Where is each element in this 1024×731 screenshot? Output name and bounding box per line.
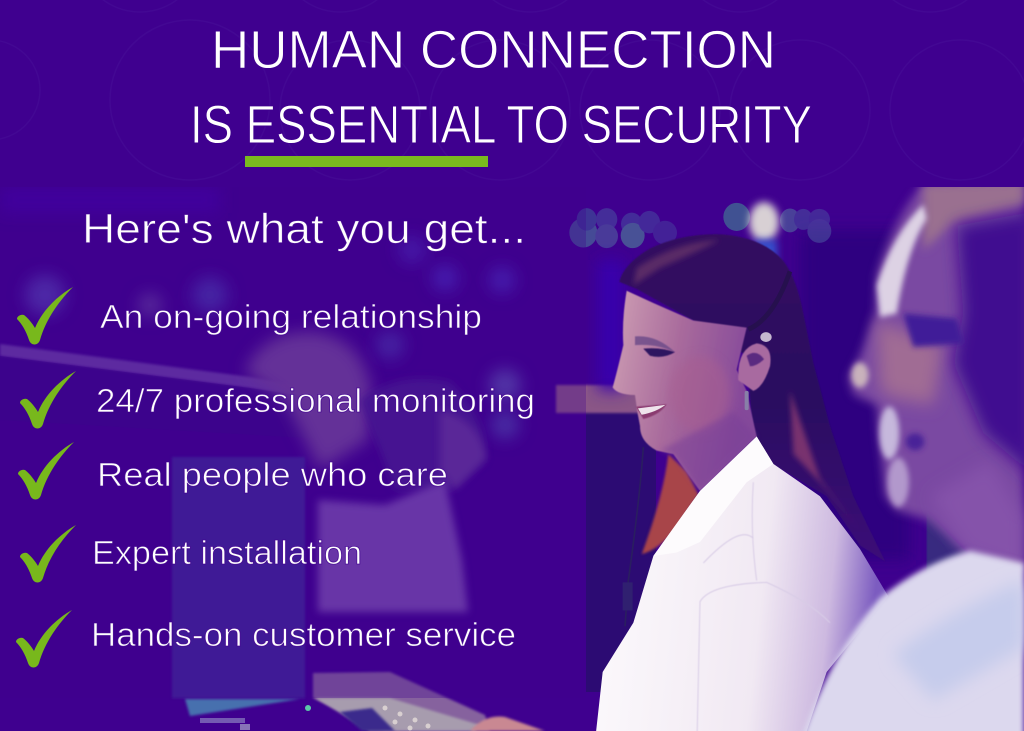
shirt (795, 551, 1024, 731)
eye shadow (903, 314, 963, 347)
item 5 (16, 610, 516, 668)
neck-back shadow (926, 516, 965, 570)
bokeh background lights (0, 187, 910, 560)
icon: check mark (20, 371, 76, 428)
eyebrow and eye (635, 336, 675, 352)
title line 1: HUMAN CONNECTION (211, 20, 776, 80)
cheek shading (698, 366, 730, 426)
decorative arc pattern band (0, 0, 1024, 180)
smile (636, 404, 667, 419)
benefit text: An on-going relationship (100, 298, 482, 335)
item 3 (18, 442, 448, 500)
nose tip (851, 362, 869, 388)
woman operator (593, 234, 888, 731)
bokeh circles (569, 203, 831, 248)
icon: check mark (17, 287, 73, 344)
item 1 (17, 287, 482, 344)
benefit text: Hands-on customer service (91, 616, 516, 653)
monitor (172, 457, 305, 698)
head base (848, 180, 1024, 574)
hair highlight (788, 393, 831, 494)
white shirt (593, 437, 888, 731)
item 2 (20, 371, 535, 428)
subheading: Here's what you get... (82, 205, 526, 252)
foreground man (blurred) (795, 180, 1024, 731)
item 4 (20, 525, 362, 582)
keyboard and desk equipment (185, 672, 545, 731)
top tan area (923, 180, 1024, 250)
benefit text: 24/7 professional monitoring (96, 382, 535, 419)
icon: check mark (16, 610, 72, 668)
title (190, 20, 812, 155)
benefit list (16, 287, 535, 668)
collar and folds (653, 437, 773, 556)
red hair strands (642, 454, 698, 554)
colleague in background (245, 332, 486, 612)
dark side of head (953, 212, 1024, 475)
hair (619, 234, 885, 561)
benefit text: Expert installation (92, 534, 362, 571)
scalp highlight (877, 205, 927, 317)
face (613, 291, 757, 491)
neck (943, 474, 1024, 568)
bright light behind woman (749, 202, 779, 242)
lips (879, 407, 899, 459)
chin (888, 458, 909, 507)
headset (748, 271, 790, 329)
title line 2: IS ESSENTIAL TO SECURITY (190, 95, 812, 155)
cheek warm (877, 321, 943, 405)
photo: control room scene (0, 180, 1024, 731)
ear and earring (738, 343, 771, 391)
icon: check mark (18, 442, 74, 500)
green accent bar (245, 156, 488, 167)
icon: check mark (20, 525, 76, 582)
benefit text: Real people who care (97, 456, 448, 493)
counter edge (0, 344, 284, 392)
dark divider and tan counter (586, 412, 656, 692)
translucent overlay panel (0, 187, 586, 698)
